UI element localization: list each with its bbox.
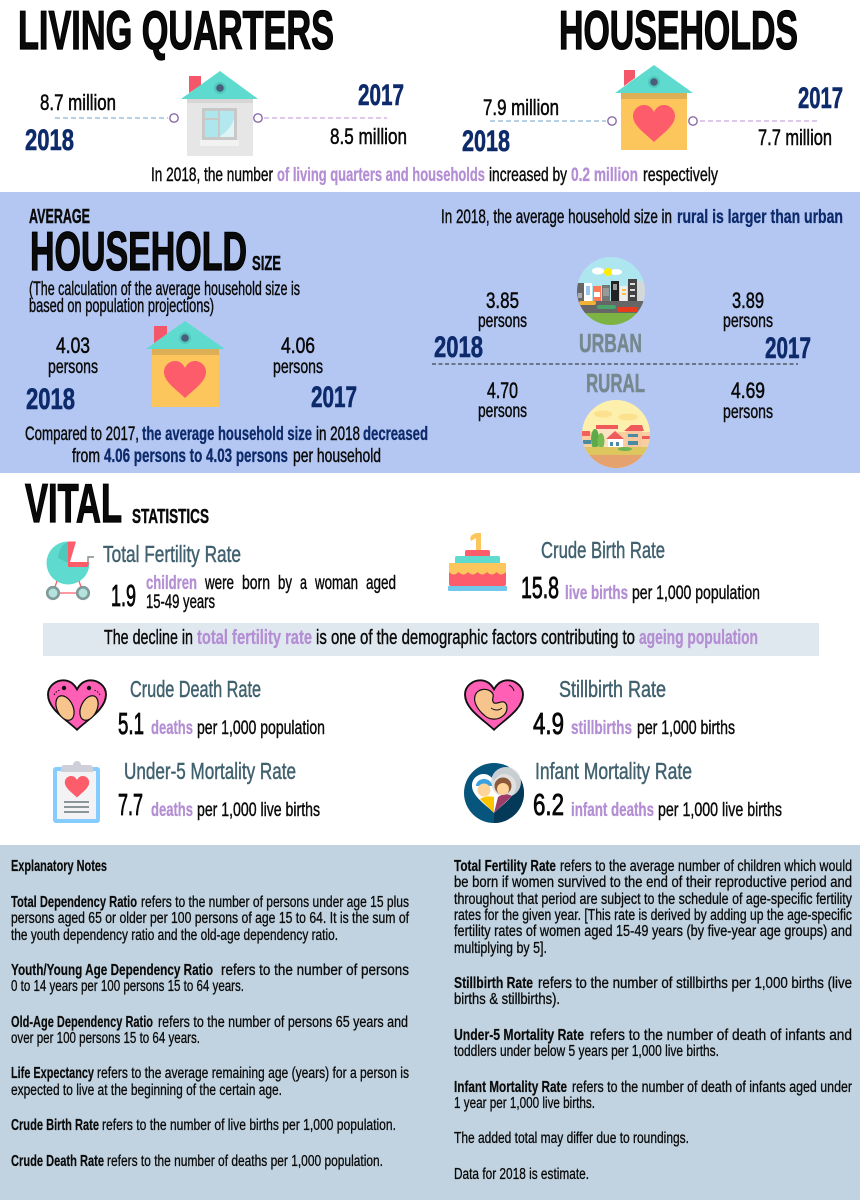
note: total dependency ratio bbox=[11, 894, 410, 944]
connector: left bbox=[55, 114, 178, 122]
value: 2017 household size bbox=[273, 333, 357, 414]
summary: household size decreased bbox=[25, 424, 428, 467]
note: total fertility rate bbox=[454, 858, 852, 957]
note: youth dependency ratio: Youth/Young Age Dependency Ratio bbox=[11, 962, 213, 979]
description: deaths bbox=[151, 800, 193, 821]
callout: ageing population bbox=[43, 623, 819, 656]
stat: crude death rate bbox=[48, 676, 325, 741]
value: rural 2018 bbox=[478, 378, 527, 422]
note: population projections bbox=[29, 279, 300, 317]
heading: average household size: HOUSEHOLD bbox=[30, 220, 247, 282]
year label 2018: 2018 bbox=[25, 124, 74, 157]
note: youth dependency ratio: refers to the number of persons bbox=[221, 962, 409, 979]
note: roundings: The added total may differ due to roundings. bbox=[454, 1130, 689, 1147]
value: 2017 household size: 2017 bbox=[311, 381, 357, 414]
description bbox=[571, 800, 782, 821]
note: infant mortality rate: Infant Mortality Rate bbox=[454, 1079, 567, 1096]
description: born bbox=[242, 573, 270, 594]
heading: average household size: SIZE bbox=[252, 253, 281, 275]
title: under-5 mortality rate: Under-5 Mortality Rate bbox=[124, 758, 296, 784]
stat: crude birth rate bbox=[448, 533, 760, 605]
note: life expectancy: expected to live at the beginning of the certain age. bbox=[11, 1082, 282, 1099]
note: total dependency ratio: the youth dependency ratio and the old-age dependency ratio. bbox=[11, 927, 338, 944]
note: old-age dependency ratio: over per 100 persons 15 to 64 years. bbox=[11, 1030, 200, 1047]
value: 1.9: 1.9 bbox=[111, 578, 136, 613]
note: stillbirth rate: Stillbirth Rate bbox=[454, 975, 533, 992]
description: deaths bbox=[151, 718, 193, 739]
summary: household size decreased: 4.06 persons to 4.03 persons bbox=[104, 446, 288, 467]
description: per 1,000 live births bbox=[197, 800, 320, 821]
note: stillbirth rate bbox=[454, 975, 852, 1008]
label: rural: RURAL bbox=[586, 368, 645, 398]
value: rural 2018: persons bbox=[478, 401, 527, 422]
value: urban 2017: 3.89 bbox=[732, 288, 764, 313]
summary: household size decreased: from bbox=[72, 446, 100, 467]
note: life expectancy: refers to the average remaining age (years) for a person is bbox=[97, 1065, 409, 1082]
note: population projections: based on population projections) bbox=[29, 296, 214, 317]
value: urban 2018: persons bbox=[478, 311, 527, 332]
icon: clipboard with heart bbox=[53, 761, 100, 823]
year label 2018: 2018 bbox=[434, 331, 483, 364]
icon: house with heart bbox=[615, 65, 693, 150]
icon: birthday cake bbox=[448, 533, 507, 591]
summary: household size decreased: Compared to 2017, bbox=[25, 424, 139, 445]
note: life expectancy bbox=[11, 1065, 409, 1099]
heading: living quarters: LIVING QUARTERS bbox=[18, 0, 334, 61]
callout: ageing population: ageing population bbox=[639, 627, 758, 649]
summary: household size decreased: per household bbox=[293, 446, 381, 467]
connector: right bbox=[689, 117, 820, 125]
title: crude death rate: Crude Death Rate bbox=[130, 676, 261, 702]
title: stillbirth rate: Stillbirth Rate bbox=[559, 676, 666, 702]
panel: households comparison bbox=[462, 65, 843, 158]
description bbox=[571, 718, 735, 739]
summary sentence: increase: In 2018, the number bbox=[151, 165, 273, 186]
callout: ageing population: The decline in bbox=[104, 627, 193, 649]
icon: heart with baby feet bbox=[48, 680, 106, 730]
note: total dependency ratio: persons aged 65 or older per 100 persons of age 15 to 64. It is the sum of bbox=[11, 910, 410, 927]
value: 4.9: 4.9 bbox=[533, 706, 564, 741]
icon: heart with embryo bbox=[465, 680, 523, 730]
value: urban 2018 bbox=[478, 288, 527, 332]
value: 2017 household size: persons bbox=[273, 357, 323, 378]
panel: average household size bbox=[0, 192, 860, 473]
note: total dependency ratio: Total Dependency Ratio bbox=[11, 894, 137, 911]
note: crude death rate bbox=[11, 1153, 383, 1170]
title: crude birth rate: Crude Birth Rate bbox=[541, 537, 665, 563]
value: 2017 living quarters: 8.5 million bbox=[330, 124, 407, 149]
description: per 1,000 live births bbox=[658, 800, 782, 821]
description: 15-49 years bbox=[146, 592, 215, 613]
value: 2018 households: 7.9 million bbox=[483, 95, 559, 120]
summary sentence: increase: of living quarters and households bbox=[277, 165, 485, 186]
description bbox=[565, 583, 760, 604]
description: aged bbox=[366, 573, 396, 594]
note: life expectancy: Life Expectancy bbox=[11, 1065, 94, 1082]
connector: left bbox=[490, 117, 616, 125]
icon: rural circle bbox=[582, 400, 650, 468]
description: live births bbox=[565, 583, 628, 604]
icon: baby stroller bbox=[46, 542, 94, 599]
note: youth dependency ratio: 0 to 14 years per 100 persons 15 to 64 years. bbox=[11, 978, 244, 995]
icon: family in heart bbox=[464, 763, 524, 823]
value: rural 2017: 4.69 bbox=[731, 378, 765, 403]
value: 2018 household size: 2018 bbox=[26, 383, 75, 416]
description: per 1,000 births bbox=[637, 718, 735, 739]
description: per 1,000 population bbox=[632, 583, 760, 604]
stat: infant mortality rate bbox=[464, 758, 782, 823]
note: total fertility rate: Total Fertility Rate bbox=[454, 858, 556, 875]
notes heading: Explanatory Notes bbox=[11, 858, 107, 875]
heading: vital statistics: STATISTICS bbox=[132, 506, 209, 528]
callout: ageing population: is one of the demographic factors contributing to bbox=[316, 627, 635, 649]
summary: household size decreased: in 2018 bbox=[316, 424, 360, 445]
note: population projections: (The calculation of the average household size is bbox=[29, 279, 300, 300]
note: crude death rate: Crude Death Rate bbox=[11, 1153, 104, 1170]
panel: explanatory notes bbox=[0, 845, 860, 1200]
description bbox=[151, 800, 320, 821]
stat: stillbirth rate bbox=[465, 676, 735, 741]
value: 2018 living quarters: 8.7 million bbox=[40, 90, 116, 115]
description bbox=[146, 573, 396, 613]
value: rural 2017 bbox=[723, 378, 773, 423]
value: rural 2017: persons bbox=[723, 402, 773, 423]
icon: house with window bbox=[181, 71, 258, 156]
summary sentence: increase: 0.2 million bbox=[571, 165, 638, 186]
description: per 1,000 population bbox=[197, 718, 325, 739]
note: old-age dependency ratio: Old-Age Dependency Ratio bbox=[11, 1014, 153, 1031]
value: 2018 household size: persons bbox=[48, 357, 98, 378]
value: 2018 household size bbox=[26, 333, 98, 416]
value: rural 2018: 4.70 bbox=[487, 378, 518, 403]
note: total fertility rate: multiplying by 5]. bbox=[454, 940, 547, 957]
heading: average household size bbox=[29, 206, 281, 282]
heading: vital statistics: VITAL bbox=[25, 472, 122, 534]
label: urban: URBAN bbox=[579, 328, 642, 358]
value: 15.8: 15.8 bbox=[521, 570, 559, 605]
year label 2017: 2017 bbox=[358, 79, 404, 112]
note: old-age dependency ratio: refers to the number of persons 65 years and bbox=[158, 1014, 408, 1031]
note: infant mortality rate bbox=[454, 1079, 852, 1112]
summary: household size decreased: the average household size bbox=[142, 424, 312, 445]
note: youth dependency ratio bbox=[11, 962, 409, 995]
note: under-5 mortality rate: Under-5 Mortality Rate bbox=[454, 1027, 584, 1044]
heading: rural vs urban sentence: In 2018, the average household size in bbox=[441, 207, 672, 228]
summary: household size decreased: decreased bbox=[363, 424, 428, 445]
note: stillbirth rate: births & stillbirths). bbox=[454, 991, 560, 1008]
description bbox=[151, 718, 325, 739]
stat: under-5 mortality rate bbox=[53, 758, 320, 823]
stat: total fertility rate bbox=[46, 541, 396, 613]
note: infant mortality rate: 1 year per 1,000 live births. bbox=[454, 1095, 595, 1112]
description: stillbirths bbox=[571, 718, 632, 739]
value: 6.2: 6.2 bbox=[533, 787, 564, 822]
title: infant mortality rate: Infant Mortality Rate bbox=[535, 758, 692, 784]
note: crude birth rate bbox=[11, 1117, 396, 1134]
title: total fertility rate: Total Fertility Rate bbox=[103, 541, 241, 567]
panel: living quarters comparison bbox=[25, 71, 407, 157]
heading: average household size: AVERAGE bbox=[29, 206, 90, 228]
year label 2018: 2018 bbox=[462, 125, 510, 158]
icon: city circle bbox=[577, 257, 645, 325]
note: total dependency ratio: refers to the number of persons under age 15 plus bbox=[141, 894, 409, 911]
description: were bbox=[204, 573, 234, 594]
description: children bbox=[146, 573, 197, 594]
year label 2017: 2017 bbox=[765, 332, 811, 365]
note: under-5 mortality rate: toddlers under below 5 years per 1,000 live births. bbox=[454, 1043, 719, 1060]
value: 2017 household size: 4.06 bbox=[281, 333, 315, 358]
callout: ageing population: total fertility rate bbox=[197, 627, 312, 649]
note: under-5 mortality rate bbox=[454, 1027, 852, 1060]
description: by bbox=[278, 573, 292, 594]
value: urban 2018: 3.85 bbox=[486, 288, 519, 313]
note: crude birth rate: Crude Birth Rate bbox=[11, 1117, 99, 1134]
note: old-age dependency ratio bbox=[11, 1014, 408, 1047]
note: crude death rate: refers to the number of deaths per 1,000 population. bbox=[107, 1153, 383, 1170]
value: 5.1: 5.1 bbox=[118, 706, 144, 741]
description: woman bbox=[314, 573, 358, 594]
description: infant deaths bbox=[571, 800, 654, 821]
description: a bbox=[300, 573, 307, 594]
icon: house with heart bbox=[146, 321, 225, 407]
value: 2018 household size: 4.03 bbox=[56, 333, 90, 358]
value: urban 2017 bbox=[723, 288, 773, 332]
value: 7.7: 7.7 bbox=[118, 787, 143, 822]
connector: right bbox=[254, 114, 387, 122]
note: data estimate: Data for 2018 is estimate. bbox=[454, 1166, 589, 1183]
summary sentence: increase: increased by bbox=[489, 165, 567, 186]
value: urban 2017: persons bbox=[723, 311, 773, 332]
value: 2017 households: 7.7 million bbox=[758, 125, 832, 150]
summary sentence: increase: respectively bbox=[643, 165, 718, 186]
note: crude birth rate: refers to the number of live births per 1,000 population. bbox=[102, 1117, 396, 1134]
summary sentence: increase bbox=[151, 165, 718, 186]
